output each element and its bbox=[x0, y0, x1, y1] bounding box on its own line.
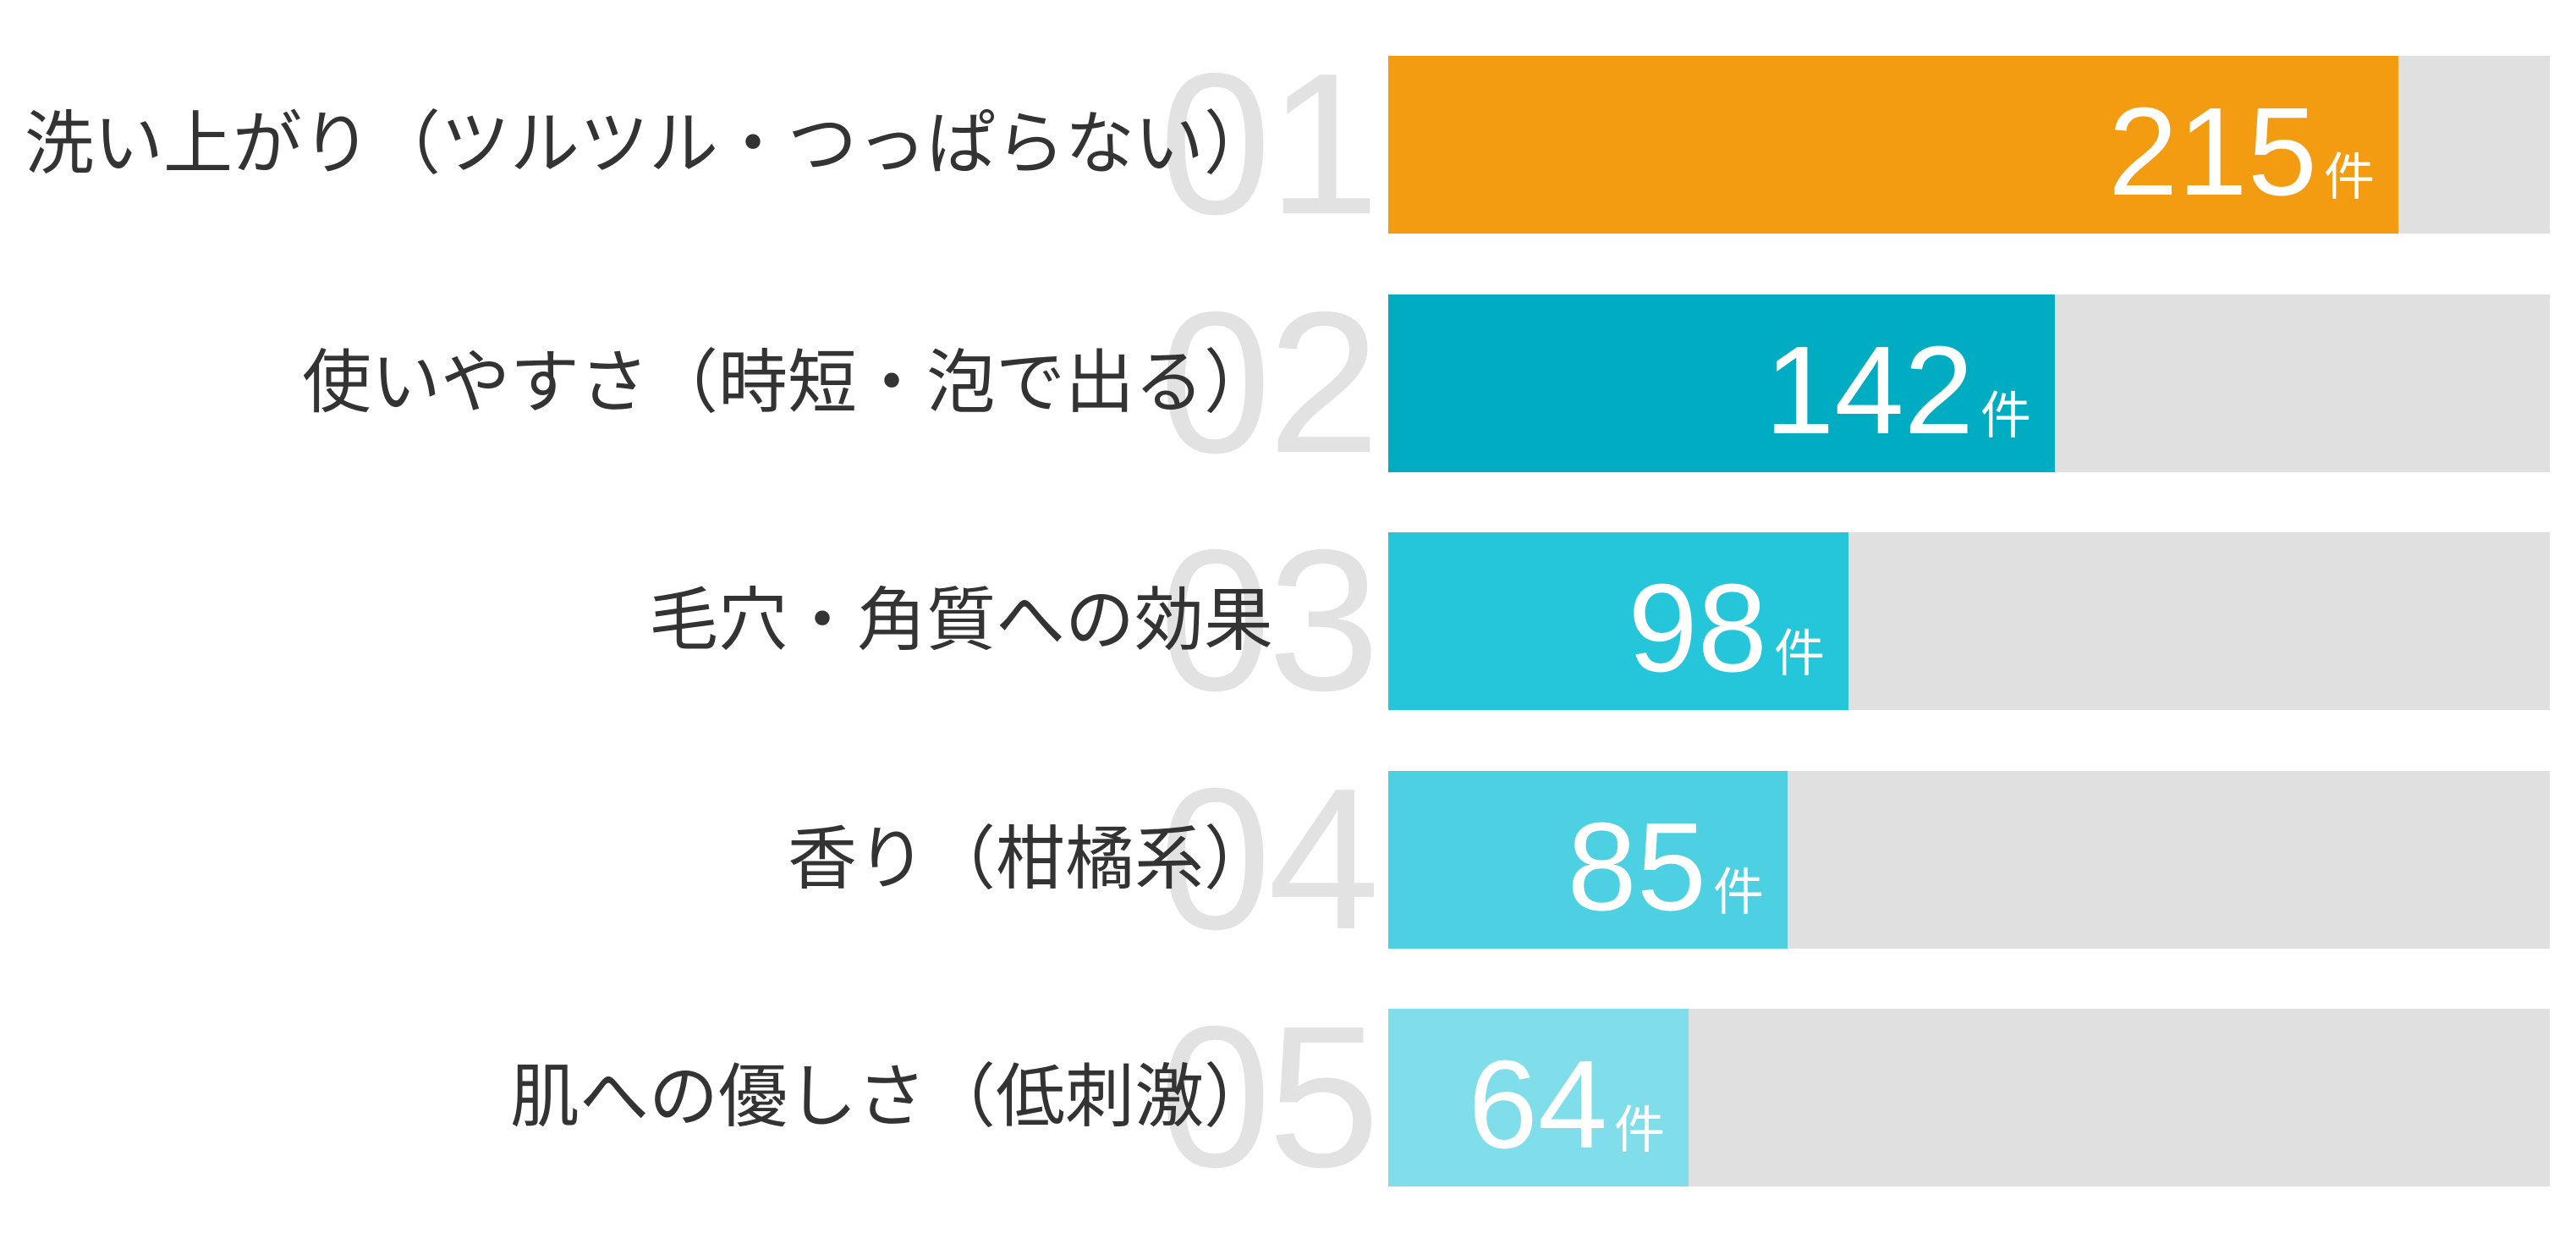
bar 2: 142件 bbox=[1765, 321, 2031, 460]
rank numeral 05: 05 bbox=[1159, 985, 1376, 1209]
rank numeral 03: 03 bbox=[1159, 509, 1376, 733]
row 4 bbox=[788, 747, 2550, 972]
label 5: 肌への優しさ（低刺激） bbox=[510, 1059, 1273, 1136]
rank numeral 02: 02 bbox=[1159, 271, 1376, 495]
rank numeral 01: 01 bbox=[1159, 32, 1376, 256]
label 4: 香り（柑橘系） bbox=[788, 821, 1273, 898]
bar 2 bbox=[1388, 294, 2550, 472]
bar 4 bbox=[1388, 771, 2550, 949]
row 3 bbox=[649, 509, 2550, 733]
bar 5 bbox=[1388, 1009, 2550, 1186]
bar 3: 98件 bbox=[1628, 559, 1825, 698]
bar 1 bbox=[1388, 56, 2550, 234]
label 1: 洗い上がり（ツルツル・つっぱらない） bbox=[25, 106, 1273, 183]
label 3: 毛穴・角質への効果 bbox=[649, 582, 1273, 659]
row 5 bbox=[510, 985, 2550, 1209]
row 2 bbox=[302, 271, 2550, 495]
bar 4: 85件 bbox=[1567, 797, 1764, 937]
bar 5: 64件 bbox=[1468, 1035, 1665, 1175]
label 2: 使いやすさ（時短・泡で出る） bbox=[302, 344, 1273, 421]
row 1 bbox=[25, 32, 2550, 256]
bar 1: 215件 bbox=[2108, 82, 2375, 222]
bar 3 bbox=[1388, 532, 2550, 710]
rank numeral 04: 04 bbox=[1159, 747, 1376, 972]
